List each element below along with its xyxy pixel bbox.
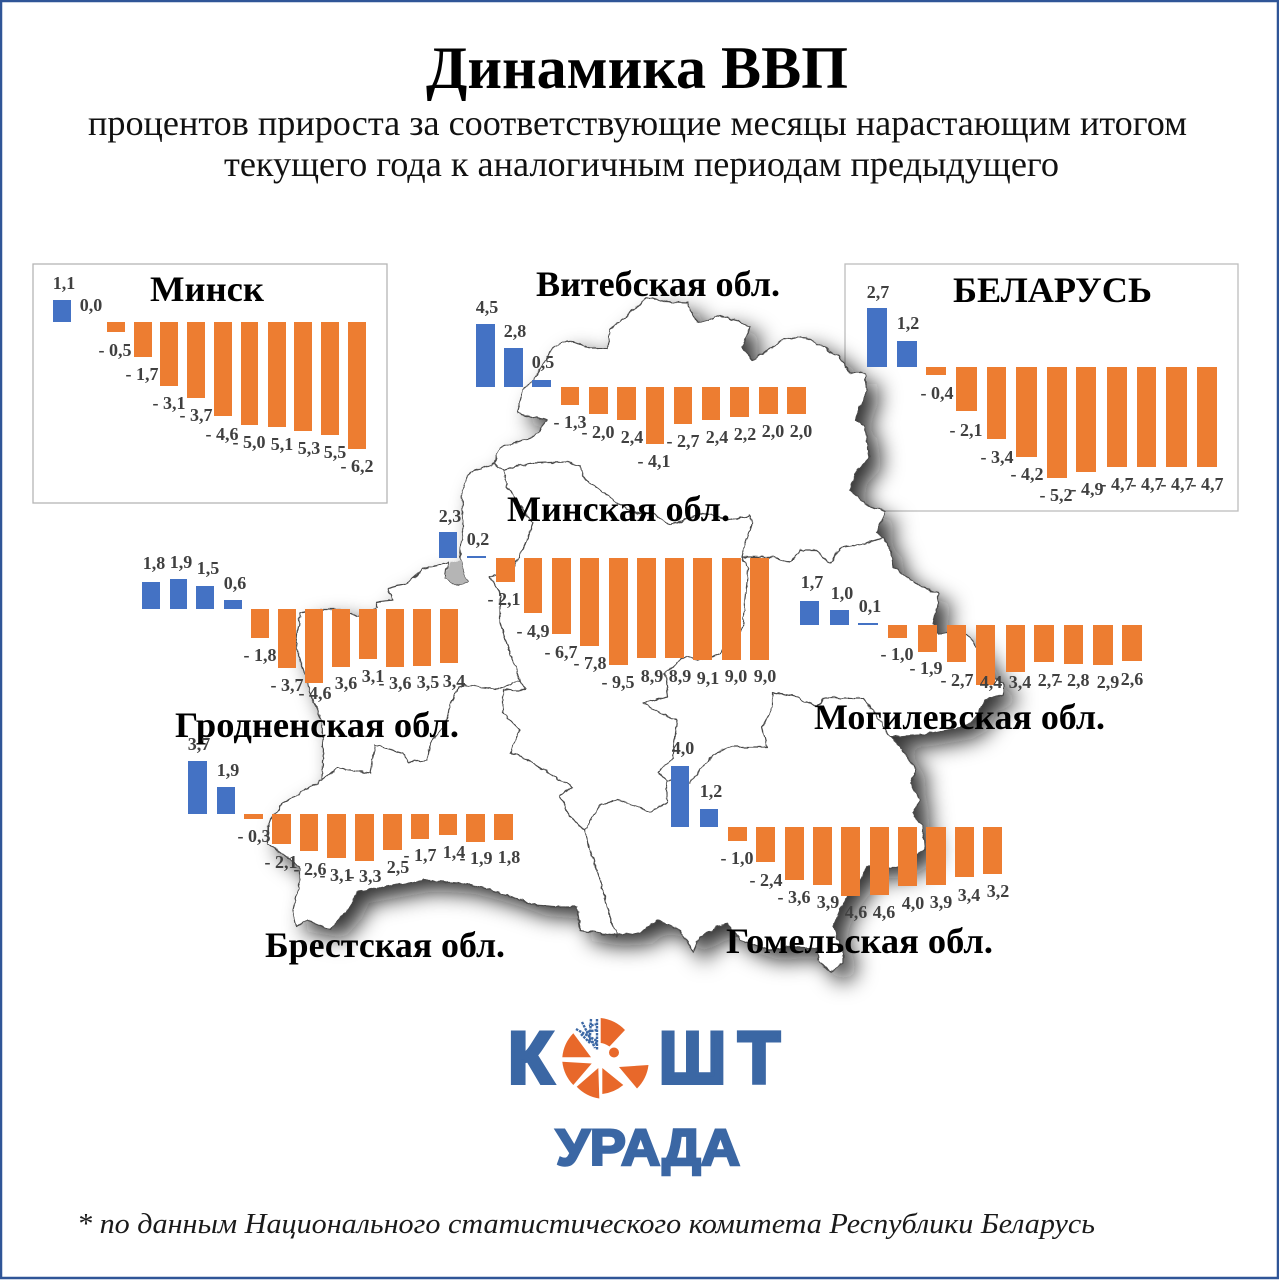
- bars: Гродненская: [142, 579, 458, 683]
- footnote: * по данным Национального статистического комитета Республики Беларусь: [77, 1209, 1095, 1240]
- value labels: Беларусь: - 4,7: [1190, 474, 1224, 494]
- value labels: Гомельская: 3,2: [987, 881, 1009, 901]
- value labels: Гродненская: 3,1: [362, 666, 384, 686]
- value labels: Гродненская: - 3,6: [378, 673, 412, 693]
- chart: Гомельская обл.: [671, 738, 1009, 961]
- value labels: Гомельская: 3,9: [930, 892, 952, 912]
- value labels: Минск: - 4,6: [206, 424, 238, 444]
- value labels: Гродненская: - 1,8: [244, 645, 276, 665]
- bars: Могилевская: [800, 601, 1142, 685]
- value labels: Минск: - 1,7: [126, 364, 158, 384]
- value labels: Гомельская: - 2,4: [750, 870, 782, 890]
- heading: Минск: Минск: [150, 269, 264, 309]
- heading: Беларусь: БЕЛАРУСЬ: [953, 270, 1152, 310]
- value labels: Витебская: 2,8: [504, 321, 526, 341]
- frame: Минск panel: [33, 264, 387, 503]
- value labels: Брестская: 1,8: [498, 847, 520, 867]
- value labels: Брестская: - 1,7: [404, 845, 436, 865]
- value labels: Минск: - 5,0: [232, 432, 266, 452]
- chart: Беларусь: [867, 270, 1224, 505]
- value labels: Гродненская: 3,5: [417, 672, 439, 692]
- bars: Гомельская: [671, 766, 1002, 896]
- value labels: Витебская: 2,2: [734, 424, 756, 444]
- bars: Брестская: [188, 761, 513, 861]
- subtitle: [88, 103, 1187, 184]
- value labels: Витебская: - 2,0: [582, 422, 614, 442]
- value labels: Гродненская: 1,9: [170, 552, 192, 572]
- value labels: Гомельская: [672, 738, 1009, 922]
- value labels: Гродненская: 1,5: [197, 558, 219, 578]
- value labels: Могилевская: [801, 572, 1143, 692]
- value labels: Могилевская: 0,1: [859, 596, 881, 616]
- value labels: Минская: 2,3: [439, 506, 461, 526]
- value labels: Могилевская: 1,7: [801, 572, 823, 592]
- value labels: Минская: 8,9: [641, 666, 663, 686]
- value labels: Минская: 9,0: [725, 666, 747, 686]
- value labels: Минск: - 0,5: [98, 340, 132, 360]
- value labels: Могилевская: - 2,7: [940, 670, 974, 690]
- value labels: Гомельская: 3,9: [817, 892, 839, 912]
- value labels: Минская: 0,2: [467, 529, 489, 549]
- value labels: Могилевская: 4,4: [980, 672, 1002, 692]
- value labels: Витебская: 0,5: [532, 352, 554, 372]
- value labels: Брестская: 3,7: [188, 734, 210, 754]
- logo wordmark: КОШТ: Т: [738, 1018, 780, 1099]
- value labels: Витебская: - 2,7: [666, 431, 700, 451]
- value labels: Беларусь: - 3,4: [980, 447, 1014, 467]
- value labels: Витебская: 4,5: [476, 297, 498, 317]
- value labels: Могилевская: 1,0: [831, 583, 853, 603]
- value labels: Минская: - 7,8: [574, 653, 606, 673]
- value labels: Брестская: - 1,9: [460, 848, 492, 868]
- value labels: Минск: - 3,1: [152, 393, 186, 413]
- bars: Витебская: [476, 324, 806, 444]
- value labels: Беларусь: - 4,2: [1010, 464, 1044, 484]
- value labels: Гродненская: 3,6: [335, 673, 357, 693]
- value labels: Брестская: - 3,3: [348, 866, 382, 886]
- value labels: Минск: 5,1: [271, 434, 293, 454]
- value labels: Беларусь: - 4,9: [1070, 479, 1104, 499]
- value labels: Гродненская: 3,4: [443, 671, 465, 691]
- heading: Могилевская обл.: Могилевская обл.: [814, 697, 1105, 737]
- value labels: Гомельская: 3,4: [958, 885, 980, 905]
- value labels: Гомельская: - 1,0: [720, 848, 754, 868]
- value labels: Минск: - 3,7: [180, 405, 212, 425]
- bars: Минск: [53, 300, 366, 449]
- value labels: Брестская: 2,5: [387, 857, 409, 877]
- value labels: Минская: 9,1: [697, 668, 719, 688]
- value labels: Брестская: - 3,1: [320, 865, 352, 885]
- value labels: Беларусь: 2,7: [867, 282, 889, 302]
- value labels: Беларусь: - 4,7: [1160, 474, 1194, 494]
- chart: Минская обл.: [439, 489, 776, 692]
- value labels: Гродненская: - 3,7: [270, 675, 304, 695]
- value labels: Брестская: [188, 734, 520, 886]
- value labels: Могилевская: 2,7: [1038, 670, 1060, 690]
- value labels: Минская: [439, 506, 776, 692]
- value labels: Минская: - 2,1: [488, 589, 520, 609]
- value labels: Гомельская: 4,0: [672, 738, 694, 758]
- heading: Гродненская обл.: Гродненская обл.: [175, 705, 459, 745]
- logo: Кошт Урада: [508, 1018, 780, 1176]
- value labels: Минск: 1,1: [53, 273, 75, 293]
- heading: Минская обл.: Минская обл.: [507, 489, 730, 529]
- chart: Гродненская обл.: [142, 552, 465, 745]
- value labels: Минск: [53, 273, 374, 476]
- value labels: Гомельская: 4,6: [873, 902, 895, 922]
- value labels: Могилевская: 2,9: [1097, 672, 1119, 692]
- value labels: Витебская: 2,0: [790, 421, 812, 441]
- value labels: Брестская: - 2,1: [264, 852, 298, 872]
- value labels: Минская: - 9,5: [602, 672, 634, 692]
- chart: Брестская обл.: [188, 734, 520, 965]
- value labels: Минская: - 4,9: [516, 621, 550, 641]
- value labels: Могилевская: - 2,8: [1056, 670, 1090, 690]
- value labels: Минская: 9,0: [754, 666, 776, 686]
- value labels: Могилевская: 3,4: [1009, 672, 1031, 692]
- value labels: Гомельская: 4,0: [902, 893, 924, 913]
- title: Динамика ВВП: [426, 35, 848, 101]
- value labels: Гомельская: 4,6: [845, 902, 867, 922]
- value labels: Беларусь: - 4,7: [1130, 474, 1164, 494]
- value labels: Минск: - 6,2: [340, 456, 374, 476]
- heading: Брестская обл.: Брестская обл.: [265, 925, 505, 965]
- value labels: Брестская: - 0,3: [238, 826, 270, 846]
- value labels: Гродненская: [143, 552, 465, 703]
- value labels: Гомельская: 1,2: [700, 781, 722, 801]
- value labels: Минск: 5,5: [324, 442, 346, 462]
- bars: Беларусь: [867, 308, 1217, 478]
- map of Belarus: [268, 298, 1015, 983]
- value labels: Витебская: 2,4: [621, 427, 643, 447]
- value labels: Могилевская: - 1,0: [880, 644, 914, 664]
- value labels: Минск: 5,3: [298, 438, 320, 458]
- bars: Минская: [439, 532, 769, 665]
- value labels: Витебская: [476, 297, 812, 471]
- heading: Витебская обл.: Витебская обл.: [536, 264, 780, 304]
- heading: Гомельская обл.: Гомельская обл.: [726, 921, 993, 961]
- value labels: Брестская: - 2,6: [294, 859, 326, 879]
- subtitle: процентов прироста за соответствующие месяцы нарастающим итогом: [88, 103, 1187, 143]
- value labels: Брестская: 1,4: [443, 842, 465, 862]
- value labels: Брестская: 1,9: [217, 760, 239, 780]
- chart: Минск: [33, 264, 387, 503]
- logo wordmark: КОШТ: [508, 1018, 780, 1099]
- value labels: Беларусь: - 0,4: [920, 383, 954, 403]
- value labels: Беларусь: 1,2: [897, 313, 919, 333]
- value labels: Могилевская: 2,6: [1121, 669, 1143, 689]
- value labels: Гродненская: 0,6: [224, 573, 246, 593]
- chart: Витебская обл.: [476, 264, 812, 471]
- logo wordmark: УРАДА: УРАДА: [556, 1119, 740, 1176]
- value labels: Минск: 0,0: [80, 295, 102, 315]
- value labels: Могилевская: - 1,9: [910, 658, 942, 678]
- logo icon: orange slices and snowflake: [562, 1018, 648, 1098]
- value labels: Витебская: 2,0: [762, 421, 784, 441]
- value labels: Беларусь: [867, 282, 1224, 505]
- value labels: Минская: - 6,7: [544, 642, 578, 662]
- value labels: Беларусь: - 5,2: [1040, 485, 1072, 505]
- frame: Беларусь panel: [845, 264, 1238, 511]
- value labels: Минская: 8,9: [669, 666, 691, 686]
- logo wordmark: КОШТ: К: [508, 1018, 553, 1099]
- value labels: Гродненская: 1,8: [143, 553, 165, 573]
- value labels: Беларусь: - 4,7: [1100, 474, 1134, 494]
- value labels: Гродненская: - 4,6: [298, 683, 332, 703]
- value labels: Витебская: - 1,3: [554, 412, 586, 432]
- value labels: Гомельская: - 3,6: [778, 887, 810, 907]
- chart: Могилевская обл.: [800, 572, 1143, 737]
- value labels: Витебская: - 4,1: [638, 451, 670, 471]
- subtitle: текущего года к аналогичным периодам предыдущего: [224, 144, 1059, 184]
- logo wordmark: КОШТ: Ш: [659, 1018, 726, 1099]
- value labels: Беларусь: - 2,1: [950, 420, 982, 440]
- value labels: Витебская: 2,4: [706, 427, 728, 447]
